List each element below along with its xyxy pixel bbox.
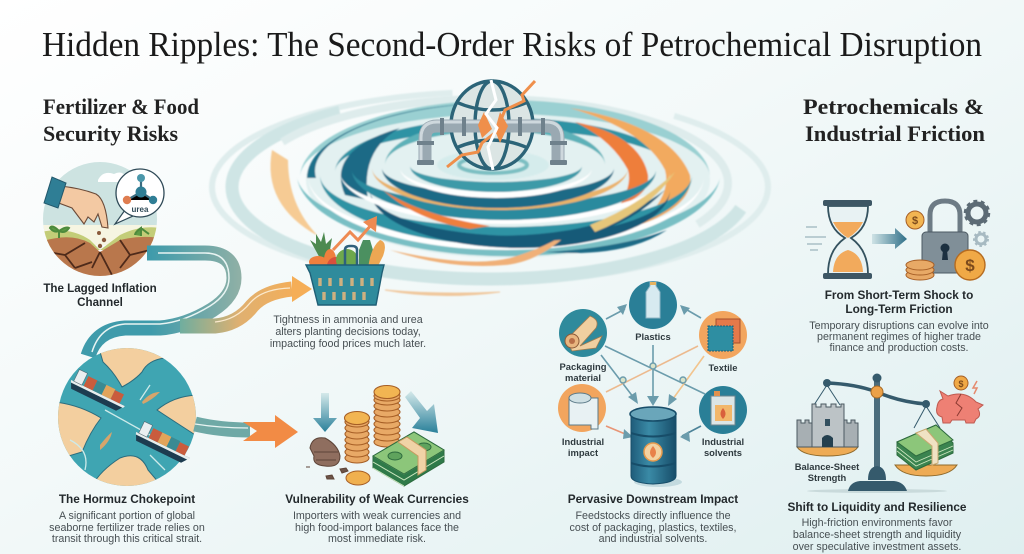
heading: petrochemicals and industrial friction: Petrochemicals & — [803, 94, 984, 119]
ship bottom — [133, 420, 196, 465]
label: from short-term shock to long-term friction: From Short-Term Shock to — [825, 288, 973, 302]
broken piggy bank — [937, 376, 983, 423]
text: pervasive downstream description: cost of packaging, plastics, textiles, — [570, 522, 736, 534]
label: the lagged inflation channel: Channel — [77, 296, 123, 309]
heading: petrochemicals and industrial friction: Industrial Friction — [805, 121, 985, 146]
node: textile — [699, 311, 747, 359]
upper rings — [300, 100, 710, 178]
text: hormuz description: A significant portion of global — [59, 510, 195, 522]
icon: hormuz strait map — [55, 345, 200, 490]
label: the lagged inflation channel: The Lagged Inflation — [43, 282, 157, 295]
node: packaging material — [559, 309, 607, 357]
icon: hourglass shock to lock — [805, 200, 989, 280]
node: industrial solvents — [699, 386, 747, 434]
icon: balance scale — [795, 374, 983, 493]
text: liquidity description: over speculative investment assets. — [793, 541, 961, 553]
globe — [451, 81, 533, 169]
icon: globe with broken pipeline — [417, 80, 567, 170]
icon: oil barrel — [630, 407, 682, 487]
connector lines — [601, 307, 705, 436]
scale stand — [814, 374, 940, 491]
cash bundle — [373, 432, 444, 486]
text: short-term shock description: Temporary disruptions can evolve into — [809, 320, 989, 332]
title: Hidden Ripples: The Second-Order Risks of Petrochemical Disruption — [42, 25, 982, 64]
label: the hormuz chokepoint: The Hormuz Chokepoint — [59, 492, 195, 506]
padlock with coins and gears: $ — [965, 256, 975, 275]
padlock with coins and gears — [906, 201, 989, 280]
seedlings — [50, 227, 149, 238]
label: shift to liquidity and resilience: Shift to Liquidity and Resilience — [788, 500, 967, 514]
text: hormuz description: transit through this critical strait. — [52, 533, 202, 545]
pipeline — [417, 117, 567, 165]
arrow: diagonal down — [405, 391, 438, 433]
text: liquidity description: balance-sheet strength and liquidity — [793, 529, 962, 541]
label: textile: Textile — [708, 362, 738, 373]
icon: food basket with rising price arrow — [306, 216, 385, 305]
lightning crack — [447, 81, 535, 167]
heading: fertilizer and food security risks: Security Risks — [43, 121, 178, 146]
hourglass — [805, 200, 872, 279]
text: hormuz description: seaborne fertilizer trade relies on — [49, 522, 205, 534]
text: short-term shock description: finance and production costs. — [829, 342, 969, 354]
text: pervasive downstream description: Feedstocks directly influence the — [575, 510, 731, 522]
coin stack short — [344, 412, 370, 463]
diagram: downstream network — [558, 281, 747, 487]
lower rings — [297, 178, 720, 256]
text: short-term shock description: permanent regimes of higher trade — [817, 331, 981, 343]
label: packaging material: Packaging — [560, 361, 607, 372]
text: weak currencies description: Importers with weak currencies and — [293, 510, 461, 522]
text: liquidity description: High-friction environments favor — [802, 517, 953, 529]
label: industrial solvents: solvents — [704, 447, 742, 458]
label: pervasive downstream impact: Pervasive Downstream Impact — [568, 492, 738, 506]
accent streaks — [383, 190, 490, 229]
coin stack tall — [374, 386, 400, 447]
arrow: down — [313, 393, 337, 432]
castle on pan — [797, 404, 858, 456]
label: vulnerability of weak currencies: Vulnerability of Weak Currencies — [285, 492, 469, 506]
arrow: orange branch to food basket — [180, 276, 312, 326]
label: plastics: Plastics — [635, 331, 671, 342]
icon: weak currencies coins and cash — [306, 386, 444, 486]
cash on pan — [895, 425, 957, 476]
text: pervasive downstream description: and industrial solvents. — [599, 533, 707, 545]
label: balance-sheet strength: Balance-Sheet — [795, 461, 859, 472]
connector arrowheads — [617, 304, 690, 442]
ship top — [68, 368, 131, 413]
arrow: shock to friction — [872, 228, 907, 249]
hand dropping seeds — [44, 177, 108, 248]
arrow: winding path from lagged inflation to hormuz — [88, 253, 234, 356]
padlock with coins and gears: $ — [912, 215, 918, 227]
central vortex swirl — [212, 92, 768, 296]
arrow: hormuz to weak currencies — [195, 415, 298, 448]
label: balance-sheet strength: Strength — [808, 472, 847, 483]
label: industrial impact: impact — [568, 447, 598, 458]
label: industrial impact: Industrial — [562, 436, 604, 447]
loose coin — [346, 471, 370, 485]
icon: lagged inflation circle — [40, 160, 164, 280]
heading: fertilizer and food security risks: Fertilizer & Food — [43, 94, 199, 119]
label: from short-term shock to long-term friction: Long-Term Friction — [845, 302, 953, 316]
text: weak currencies description: high food-import balances face the — [295, 522, 459, 534]
text: food price lag description: impacting food prices much later. — [270, 338, 426, 350]
label: industrial solvents: Industrial — [702, 436, 744, 447]
text: food price lag description: alters planting decisions today, — [275, 326, 421, 338]
node: industrial impact — [558, 384, 606, 432]
broken piggy bank: $ — [958, 379, 964, 389]
text: weak currencies description: most immediate risk. — [328, 533, 426, 545]
connector nodes — [620, 363, 686, 383]
text: food price lag description: Tightness in ammonia and urea — [273, 314, 423, 326]
urea callout bubble: urea — [132, 205, 149, 214]
node: plastics — [629, 281, 677, 329]
rubble — [310, 438, 340, 466]
label: packaging material: material — [565, 372, 601, 383]
